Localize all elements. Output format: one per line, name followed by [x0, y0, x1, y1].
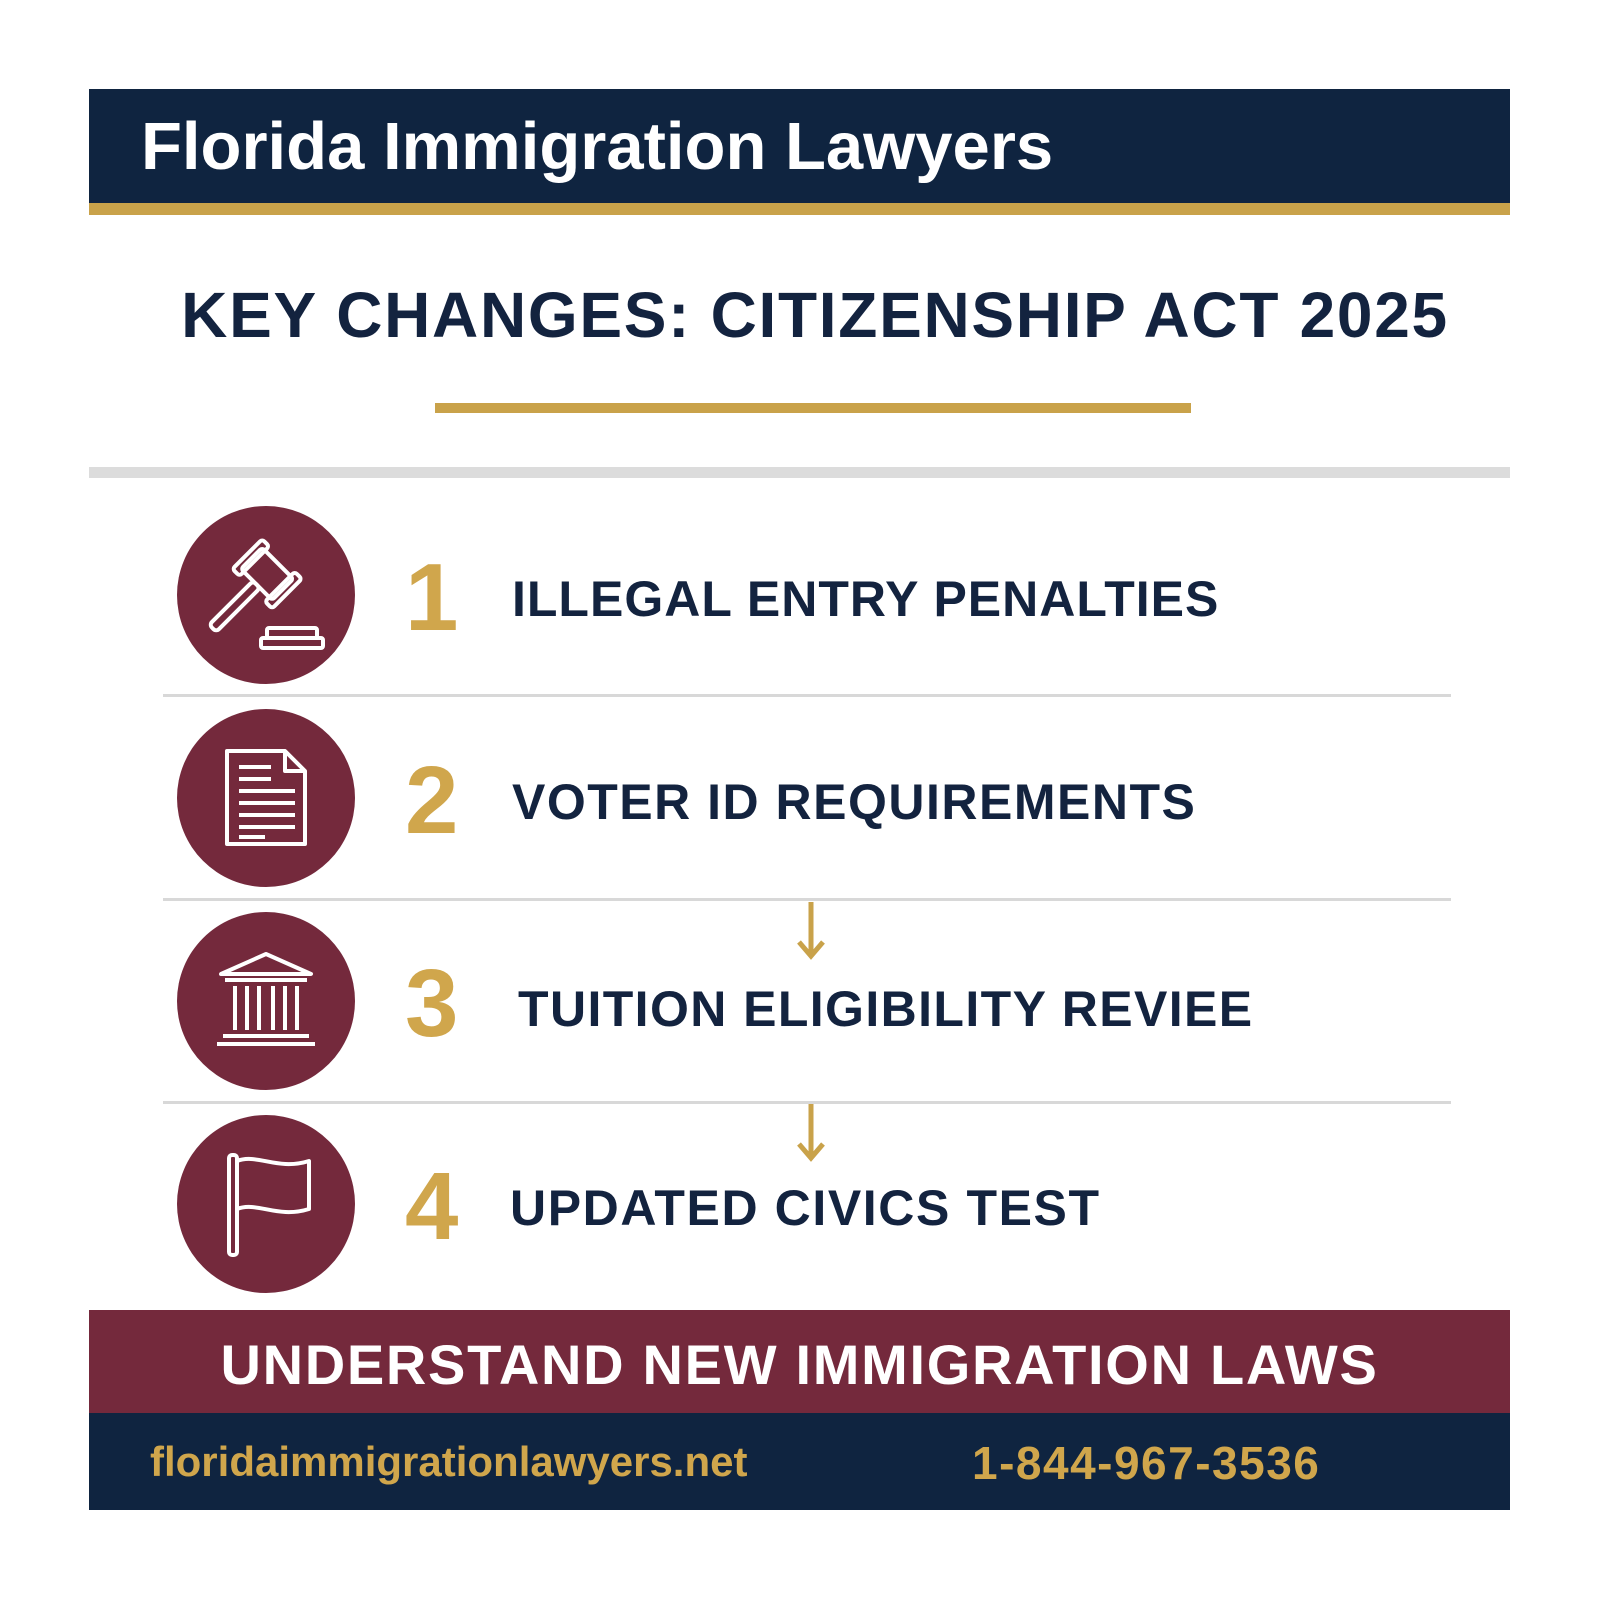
footer bar — [89, 1413, 1510, 1510]
number 4: 4 — [405, 1153, 458, 1260]
label 1: ILLEGAL ENTRY PENALTIES — [512, 571, 1219, 627]
arrow 1 — [797, 902, 825, 960]
website: floridaimmigrationlawyers.net — [150, 1438, 747, 1485]
item 1 — [177, 506, 1219, 684]
label 4: UPDATED CIVICS TEST — [510, 1180, 1101, 1236]
gold stripe — [89, 203, 1510, 215]
label 3: TUITION ELIGIBILITY REVIEE — [518, 981, 1254, 1037]
item 3 — [177, 912, 1254, 1090]
number 2: 2 — [405, 747, 458, 854]
item 4 — [177, 1115, 1101, 1293]
phone: 1-844-967-3536 — [972, 1437, 1320, 1489]
main title: KEY CHANGES: CITIZENSHIP ACT 2025 — [181, 279, 1449, 351]
arrow 2 — [797, 1104, 825, 1162]
item 2 — [177, 709, 1196, 887]
banner text: UNDERSTAND NEW IMMIGRATION LAWS — [220, 1333, 1379, 1396]
icon: building — [177, 912, 355, 1090]
header title: Florida Immigration Lawyers — [141, 109, 1053, 184]
number 1: 1 — [405, 544, 458, 651]
number 3: 3 — [405, 950, 458, 1057]
icon: flag — [177, 1115, 355, 1293]
label 2: VOTER ID REQUIREMENTS — [512, 774, 1196, 830]
icon: gavel — [177, 506, 355, 684]
title underline — [435, 403, 1191, 413]
icon: document — [177, 709, 355, 887]
red banner — [89, 1310, 1510, 1413]
header bar — [89, 89, 1510, 203]
